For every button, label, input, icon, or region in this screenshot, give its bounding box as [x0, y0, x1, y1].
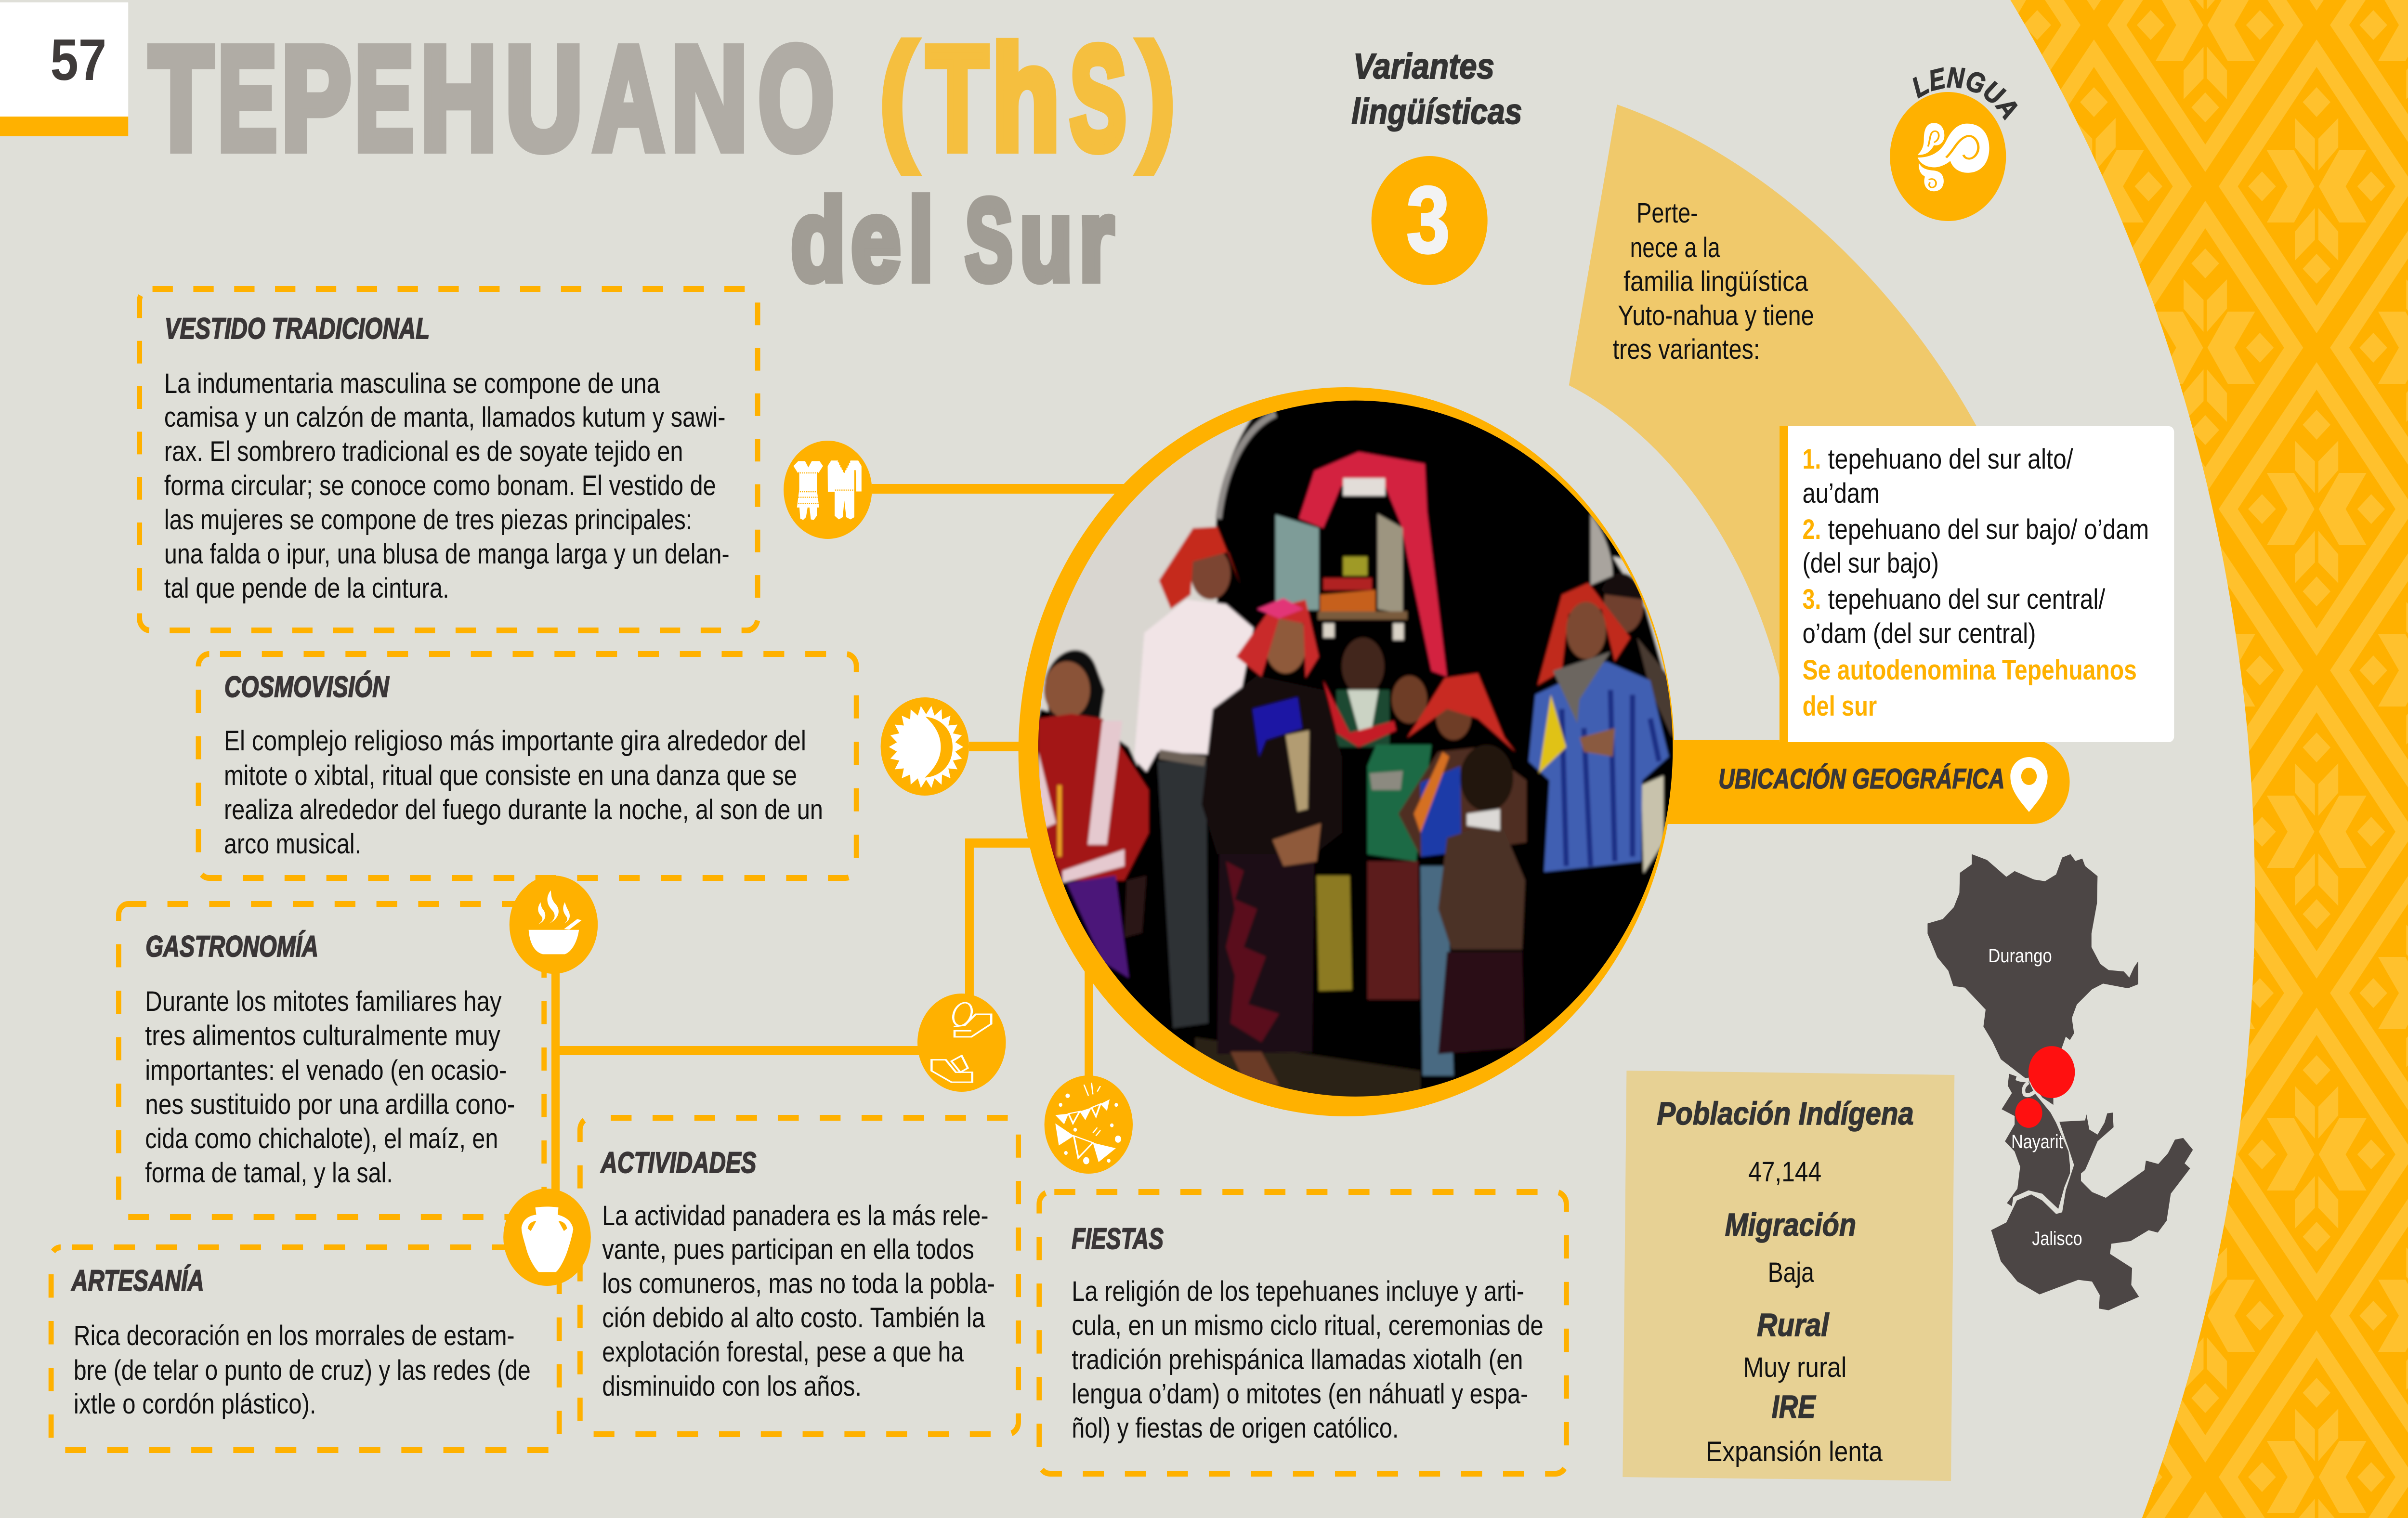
variantes lingüísticas heading [1351, 46, 1522, 131]
body text [74, 1320, 531, 1420]
población: 47,144 [1748, 1156, 1821, 1188]
connector: vestido [872, 484, 1132, 494]
IRE: IRE [1772, 1388, 1817, 1425]
body text: importantes: el venado (en ocasio- [145, 1054, 507, 1086]
variant 3: tepehuano del sur central/ [1828, 583, 2106, 615]
rural: Rural [1757, 1307, 1830, 1343]
girl with scarf [1420, 866, 1453, 1075]
language family text: Yuto-nahua y tiene [1618, 300, 1814, 331]
body text [164, 367, 730, 604]
body text: disminuido con los años. [602, 1370, 862, 1402]
body text: vante, pues participan en ella todos [602, 1233, 974, 1265]
background: woven orange pattern [1949, 0, 2408, 1518]
icon: fiestas [1045, 1075, 1133, 1174]
body text: tal que pende de la cintura. [164, 572, 449, 604]
connector: gastronomía to artesanía [551, 968, 920, 1194]
title [149, 14, 1178, 305]
body text: arco musical. [224, 828, 361, 860]
language family text [1613, 197, 1814, 365]
heading: ACTIVIDADES [600, 1146, 757, 1179]
icon: pin [2010, 757, 2048, 812]
body text: mitote o xibtal, ritual que consiste en una danza que se [224, 759, 797, 791]
panel: cosmovisión [198, 654, 856, 878]
back figure [1342, 638, 1384, 695]
connector: fiestas [1085, 958, 1093, 1079]
body text [145, 985, 515, 1189]
heading: ARTESANÍA [71, 1264, 204, 1297]
body text: rax. El sombrero tradicional es de soyate tejido en [164, 435, 683, 467]
body text: La indumentaria masculina se compone de una [164, 367, 660, 399]
población: Población Indígena [1657, 1095, 1914, 1132]
icon: gastronomía [510, 876, 598, 974]
variant 1: au’dam [1803, 477, 1880, 509]
icon: vestido [784, 441, 872, 539]
body text: ixtle o cordón plástico). [74, 1388, 316, 1420]
title: e [851, 175, 901, 305]
self-denomination: del sur [1803, 690, 1877, 722]
language family text: tres variantes: [1613, 333, 1760, 365]
variantes lingüísticas heading: Variantes [1353, 46, 1494, 86]
variant 2: (del sur bajo) [1803, 547, 1939, 579]
migración [1725, 1206, 1856, 1288]
variants count circle: 3 [1406, 167, 1450, 273]
variant 1 [1803, 443, 2073, 509]
title: r [1079, 175, 1113, 305]
label: UBICACIÓN GEOGRÁFICA [1718, 763, 2005, 795]
icon: actividades [917, 994, 1006, 1092]
body text: explotación forestal, pese a que ha [602, 1336, 964, 1368]
central woman [1202, 676, 1342, 854]
body text: cida como chichalote), el maíz, en [145, 1123, 498, 1154]
title: ( [877, 14, 920, 176]
body text [602, 1200, 995, 1402]
body text: La religión de los tepehuanes incluye y arti- [1072, 1275, 1524, 1307]
body text: lengua o’dam) o mitotes (en náhuatl y espa- [1072, 1378, 1528, 1410]
title: P [282, 17, 351, 180]
variant 3: o’dam (del sur central) [1803, 617, 2036, 649]
photo ring [1019, 387, 1674, 1116]
title: S [965, 175, 1013, 305]
self-denomination [1803, 654, 2137, 722]
self-denomination: Se autodenomina Tepehuanos [1803, 654, 2137, 686]
body text: La actividad panadera es la más rele- [602, 1200, 989, 1231]
panel: variants list [1780, 426, 2174, 742]
altar [1299, 452, 1447, 677]
title: T [927, 17, 988, 180]
migración: Baja [1768, 1256, 1814, 1288]
title: N [671, 17, 747, 180]
panel: population data [1623, 1071, 1954, 1481]
rural: Muy rural [1743, 1351, 1846, 1383]
title: ) [1136, 14, 1178, 176]
title: S [1070, 17, 1126, 180]
body text: ñol) y fiestas de origen católico. [1072, 1412, 1399, 1444]
map labels: Durango [1988, 945, 2052, 967]
rural [1743, 1307, 1846, 1383]
map labels [1988, 945, 2082, 1249]
variantes lingüísticas heading: lingüísticas [1351, 92, 1522, 131]
title: l [908, 175, 933, 305]
language family text: nece a la [1630, 232, 1720, 263]
language family text: Perte- [1636, 197, 1698, 229]
panel: vestido tradicional [140, 289, 758, 630]
icon: artesanía [503, 1189, 591, 1286]
small girl [1460, 745, 1513, 811]
body text [1072, 1275, 1544, 1444]
body text: tradición prehispánica llamadas xiotalh (en [1072, 1344, 1523, 1375]
body text: Durante los mitotes familiares hay [145, 985, 502, 1017]
body text: bre (de telar o punto de cruz) y las redes (de [74, 1354, 531, 1386]
icon: lengua [1890, 67, 2018, 221]
body text: tres alimentos culturalmente muy [145, 1020, 500, 1051]
body text: forma circular; se conoce como bonam. El vestido de [164, 470, 716, 501]
panel: actividades [580, 1118, 1019, 1434]
heading: VESTIDO TRADICIONAL [165, 312, 430, 345]
title: E [218, 17, 277, 180]
body text: los comuneros, mas no toda la pobla- [602, 1268, 995, 1299]
variant 3: 3. [1803, 583, 1821, 615]
map: locality large [2028, 1046, 2075, 1098]
green shirt boy [1392, 676, 1427, 723]
panel: artesanía [51, 1247, 559, 1450]
language family text: familia lingüística [1623, 265, 1808, 297]
ubicación geográfica pill [1603, 740, 2070, 824]
body text: nes sustituido por una ardilla cono- [145, 1088, 515, 1120]
heading: FIESTAS [1072, 1222, 1164, 1256]
body text: camisa y un calzón de manta, llamados kutum y sawi- [164, 401, 726, 433]
body text: forma de tamal, y la sal. [145, 1157, 393, 1189]
icon: sol y luna [881, 697, 969, 796]
woman left [1045, 650, 1104, 719]
map: Jalisco [1991, 1112, 2193, 1310]
number badge: 57 [50, 27, 106, 92]
body text: Rica decoración en los morrales de estam- [74, 1320, 515, 1351]
title: U [506, 17, 583, 180]
title: E [355, 17, 414, 180]
map labels: Nayarit [2011, 1131, 2063, 1152]
language family sector [1569, 105, 1976, 698]
IRE [1706, 1388, 1883, 1467]
body text: ción debido al alto costo. También la [602, 1302, 985, 1334]
man white shirt [1158, 761, 1208, 1028]
variant 2: 2. [1803, 513, 1821, 545]
body text [224, 725, 823, 860]
body text: El complejo religioso más importante gira alrededor del [224, 725, 806, 757]
body text: cula, en un mismo ciclo ritual, ceremonias de [1072, 1309, 1544, 1341]
wall [1039, 419, 1255, 769]
heading: COSMOVISIÓN [224, 670, 390, 704]
map: Nayarit [2002, 1074, 2070, 1209]
title: d [791, 175, 846, 305]
variants count circle [1372, 156, 1488, 285]
back right man [1604, 576, 1644, 633]
variant 2 [1803, 513, 2149, 579]
heading: GASTRONOMÍA [145, 930, 318, 963]
man blue shirt [1544, 871, 1641, 1023]
title: u [1020, 175, 1073, 305]
title: A [593, 17, 664, 180]
población [1657, 1095, 1914, 1188]
title: T [149, 17, 213, 180]
number badge [0, 2, 128, 136]
variant 3 [1803, 583, 2106, 649]
variant 2: tepehuano del sur bajo/ o’dam [1828, 513, 2149, 545]
map: locality small [2015, 1098, 2042, 1128]
title: O [759, 17, 834, 180]
body text: una falda o ipur, una blusa de manga larga y un delan- [164, 538, 730, 570]
IRE: Expansión lenta [1706, 1436, 1883, 1467]
panel: fiestas [1039, 1192, 1566, 1474]
migración: Migración [1725, 1206, 1856, 1243]
map: Durango [1927, 854, 2138, 1105]
icon: lengua: LENGUA [1913, 67, 2018, 120]
connector: actividades [965, 838, 1061, 997]
body text: realiza alrededor del fuego durante la noche, al son de un [224, 794, 823, 825]
body text: las mujeres se compone de tres piezas principales: [164, 504, 692, 536]
variant 1: 1. [1803, 443, 1821, 475]
map labels: Jalisco [2032, 1228, 2082, 1249]
floor [1195, 1037, 1420, 1104]
photo: group portrait [1023, 385, 1686, 1109]
variant 1: tepehuano del sur alto/ [1828, 443, 2073, 475]
title: H [420, 17, 497, 180]
title: h [992, 17, 1060, 180]
map [1927, 854, 2193, 1310]
connector: cosmovisión [969, 742, 1025, 751]
panel: gastronomía [118, 904, 544, 1217]
